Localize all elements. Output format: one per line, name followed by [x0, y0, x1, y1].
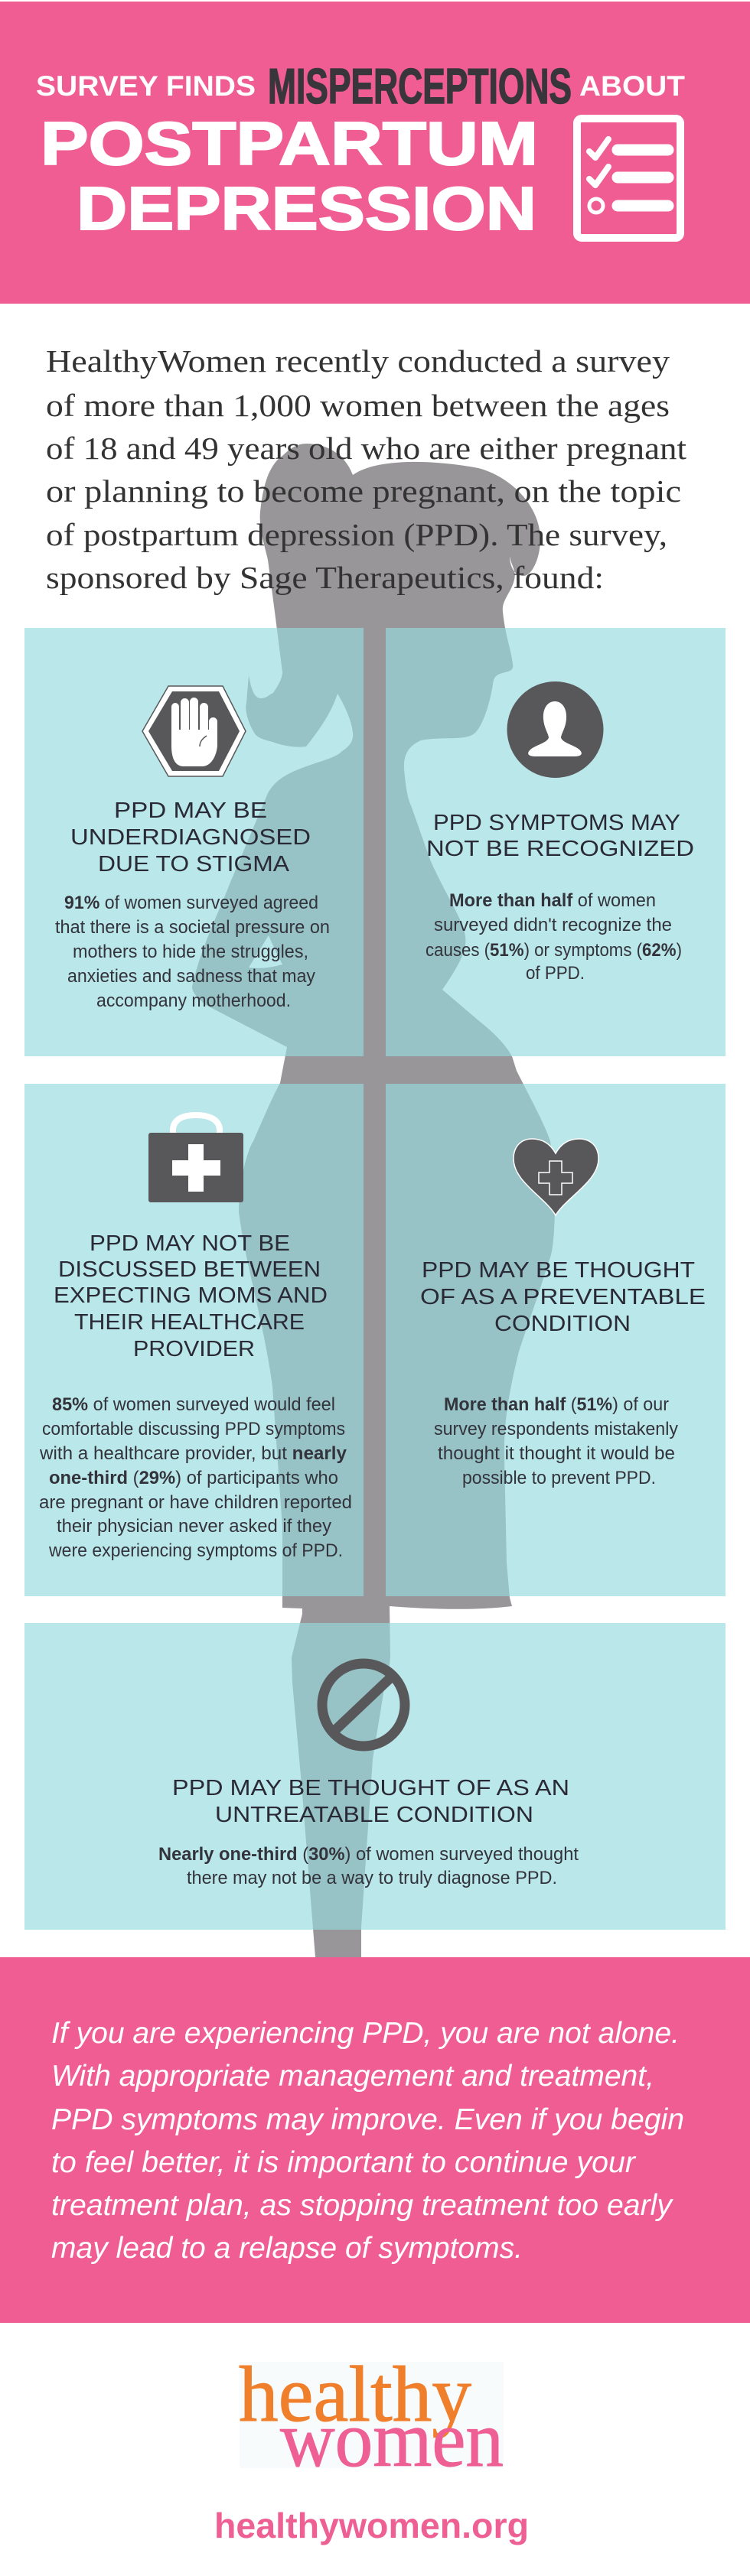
- body text: causes (51%) or symptoms (62%): [426, 940, 682, 961]
- callout text: If you are experiencing PPD, you are not alone.: [51, 2017, 680, 2050]
- header banner: [0, 2, 750, 304]
- body text: [426, 890, 682, 984]
- heading: UNDERDIAGNOSED: [70, 825, 311, 850]
- headline: postpartum: POSTPARTUM: [41, 109, 538, 177]
- heading: [54, 1231, 328, 1361]
- heading: UNTREATABLE CONDITION: [215, 1803, 533, 1827]
- heading: PPD MAY BE: [114, 798, 267, 823]
- body text: possible to prevent PPD.: [462, 1468, 656, 1488]
- heading: [70, 798, 311, 877]
- intro paragraph: sponsored by Sage Therapeutics, found:: [46, 560, 604, 595]
- intro paragraph: or planning to become pregnant, on the topic: [46, 473, 681, 509]
- headline word: about: ABOUT: [579, 70, 685, 102]
- body text: 85% of women surveyed would feel: [52, 1394, 335, 1415]
- body text: of PPD.: [526, 963, 585, 984]
- heading: PPD MAY NOT BE: [90, 1231, 290, 1256]
- logo: healthy women: healthy: [239, 2350, 471, 2438]
- icon: prohibition sign: [322, 1664, 405, 1746]
- body text: surveyed didn't recognize the: [434, 915, 672, 935]
- body text: with a healthcare provider, but nearly: [39, 1443, 347, 1464]
- heading: CONDITION: [494, 1312, 631, 1336]
- body text: [55, 893, 330, 1011]
- callout text: [51, 2017, 684, 2265]
- headline word: misperceptions: MISPERCEPTIONS: [268, 58, 572, 114]
- heading: PPD MAY BE THOUGHT OF AS AN: [172, 1776, 569, 1800]
- intro paragraph: HealthyWomen recently conducted a survey: [46, 343, 670, 379]
- heading: THEIR HEALTHCARE: [74, 1310, 305, 1335]
- heading: EXPECTING MOMS AND: [54, 1283, 328, 1308]
- website url: healthywomen.org: [214, 2506, 529, 2545]
- body text: [39, 1394, 352, 1561]
- body text: anxieties and sadness that may: [67, 966, 315, 987]
- intro paragraph: [46, 343, 687, 595]
- callout text: PPD symptoms may improve. Even if you begin: [51, 2103, 684, 2136]
- body text: More than half of women: [449, 890, 656, 911]
- body text: thought it thought it would be: [438, 1443, 675, 1464]
- body text: accompany motherhood.: [96, 990, 291, 1011]
- body text: More than half (51%) of our: [444, 1394, 669, 1415]
- headline line: survey finds: SURVEY FINDS: [36, 70, 256, 102]
- intro paragraph: of more than 1,000 women between the ages: [46, 388, 670, 423]
- icon: stop hand in hexagon: [142, 686, 246, 776]
- panel: underdiagnosed due to stigma: [24, 628, 364, 1056]
- body text: 91% of women surveyed agreed: [64, 893, 318, 913]
- icon: heart with cross: [514, 1139, 598, 1215]
- body text: are pregnant or have children reported: [39, 1492, 352, 1513]
- callout text: to feel better, it is important to continue your: [51, 2146, 637, 2179]
- heading: DUE TO STIGMA: [98, 852, 290, 877]
- heading: PROVIDER: [133, 1337, 255, 1361]
- icon: medical bag: [148, 1115, 243, 1202]
- body text: [434, 1394, 678, 1488]
- intro paragraph: of postpartum depression (PPD). The survey,: [46, 517, 667, 552]
- icon: person in circle: [507, 681, 603, 778]
- intro paragraph: of 18 and 49 years old who are either pregnant: [46, 431, 687, 466]
- body text: were experiencing symptoms of PPD.: [48, 1540, 343, 1561]
- heading: [420, 1258, 706, 1336]
- callout text: may lead to a relapse of symptoms.: [51, 2232, 523, 2265]
- logo: healthy women: women: [280, 2395, 504, 2483]
- body text: [158, 1844, 579, 1888]
- heading: NOT BE RECOGNIZED: [426, 837, 694, 861]
- body text: mothers to hide the struggles,: [73, 942, 308, 962]
- body text: survey respondents mistakenly: [434, 1419, 678, 1439]
- panel: not discussed with healthcare provider: [24, 1084, 364, 1596]
- icon: checklist: [577, 119, 680, 238]
- headline: depression: DEPRESSION: [77, 174, 536, 242]
- heading: PPD SYMPTOMS MAY: [433, 811, 680, 835]
- body text: one-third (29%) of participants who: [49, 1468, 338, 1488]
- silhouette: pregnant woman: [192, 444, 556, 1957]
- callout text: treatment plan, as stopping treatment too early: [51, 2189, 674, 2222]
- heading: PPD MAY BE THOUGHT: [422, 1258, 695, 1283]
- panel: symptoms may not be recognized: [386, 628, 726, 1056]
- panel: thought of as untreatable: [24, 1623, 726, 1930]
- heading: OF AS A PREVENTABLE: [420, 1285, 706, 1309]
- body text: that there is a societal pressure on: [55, 917, 330, 938]
- callout banner: [0, 1957, 750, 2323]
- callout text: With appropriate management and treatment,: [51, 2060, 654, 2093]
- logo: healthy women: [239, 2350, 504, 2483]
- body text: Nearly one-third (30%) of women surveyed thought: [158, 1844, 579, 1865]
- body text: there may not be a way to truly diagnose PPD.: [187, 1868, 557, 1888]
- heading: [172, 1776, 569, 1827]
- heading: [426, 811, 694, 861]
- panel: thought of as preventable: [386, 1084, 726, 1596]
- body text: comfortable discussing PPD symptoms: [42, 1419, 345, 1439]
- body text: their physician never asked if they: [57, 1516, 331, 1537]
- heading: DISCUSSED BETWEEN: [58, 1257, 321, 1282]
